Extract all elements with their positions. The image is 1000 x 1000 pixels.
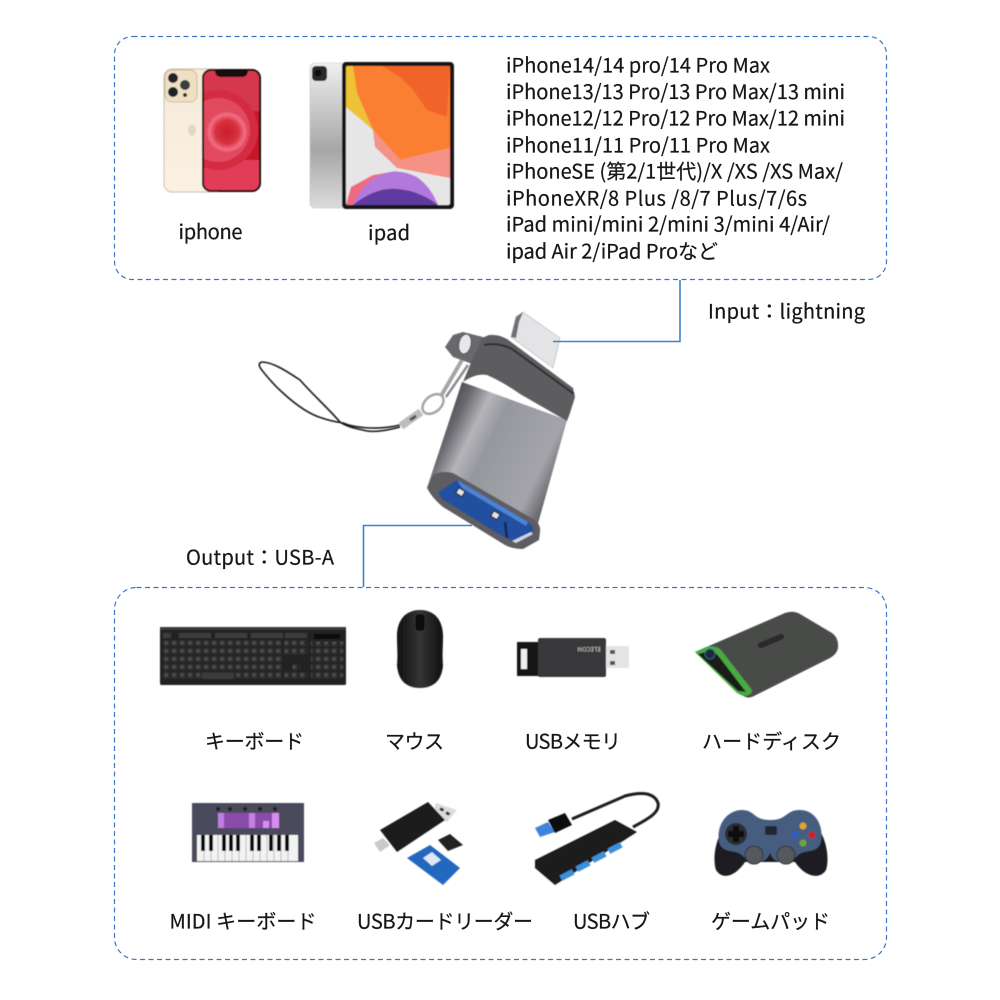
- icon: mouse: [397, 610, 443, 688]
- product: adapter with lanyard: [259, 312, 575, 549]
- icon: USB memory: ELECOM: [577, 645, 601, 654]
- text block: compatible models: [506, 50, 845, 264]
- label: USB memory: USBメモリ: [525, 726, 621, 754]
- panel: connectable USB devices: [114, 588, 886, 960]
- text block: compatible models: iPhone14/14 pro/14 Pro Max: [506, 50, 770, 78]
- label: hard disk: ハードディスク: [702, 726, 841, 754]
- USB port: [427, 472, 540, 549]
- label: USB card reader: USBカードリーダー: [357, 906, 533, 934]
- icon: USB hub: [535, 794, 658, 885]
- lightning plug: [511, 312, 560, 368]
- icon: USB card reader: [374, 802, 463, 885]
- text block: compatible models: ipad Air 2/iPad Proなど: [506, 236, 718, 264]
- metal clasp: [401, 360, 468, 426]
- aluminium body: [427, 382, 567, 547]
- text block: compatible models: iPhone12/12 Pro/12 Pro Max/12 mini: [506, 102, 845, 132]
- label: input: Input：lightning: [708, 296, 865, 324]
- icon: iPhone: [164, 69, 261, 192]
- text block: compatible models: iPhone11/11 Pro/11 Pro Max: [506, 130, 770, 158]
- icon: keyboard: [160, 627, 346, 685]
- leader line: input: [553, 280, 680, 342]
- label: output: Output：USB-A: [186, 542, 335, 570]
- leader line: output: [364, 526, 472, 587]
- label: gamepad: ゲームパッド: [711, 906, 830, 934]
- dark cap with loop: [445, 332, 575, 421]
- icon: USB memory: [517, 638, 629, 677]
- label: MIDI keyboard: MIDI キーボード: [170, 906, 316, 934]
- label: iphone: iphone: [178, 216, 242, 245]
- label: keyboard: キーボード: [205, 726, 304, 754]
- lanyard strap: [259, 362, 400, 431]
- icon: MIDI keyboard: [192, 803, 304, 862]
- icon: gamepad: [714, 810, 828, 876]
- text block: compatible models: iPhoneXR/8 Plus /8/7 Plus/7/6s: [506, 182, 807, 212]
- label: USB hub: USBハブ: [573, 906, 650, 934]
- label: mouse: マウス: [385, 726, 444, 754]
- label: ipad: ipad: [368, 217, 410, 246]
- icon: iPad: [310, 62, 454, 209]
- text block: compatible models: iPad mini/mini 2/mini 3/mini 4/Air/: [506, 208, 830, 238]
- text block: compatible models: iPhoneSE (第2/1世代)/X /XS /XS Max/: [506, 156, 843, 184]
- panel: compatible Apple devices: [114, 36, 886, 280]
- icon: hard disk: [695, 612, 838, 698]
- text block: compatible models: iPhone13/13 Pro/13 Pro Max/13 mini: [506, 76, 845, 105]
